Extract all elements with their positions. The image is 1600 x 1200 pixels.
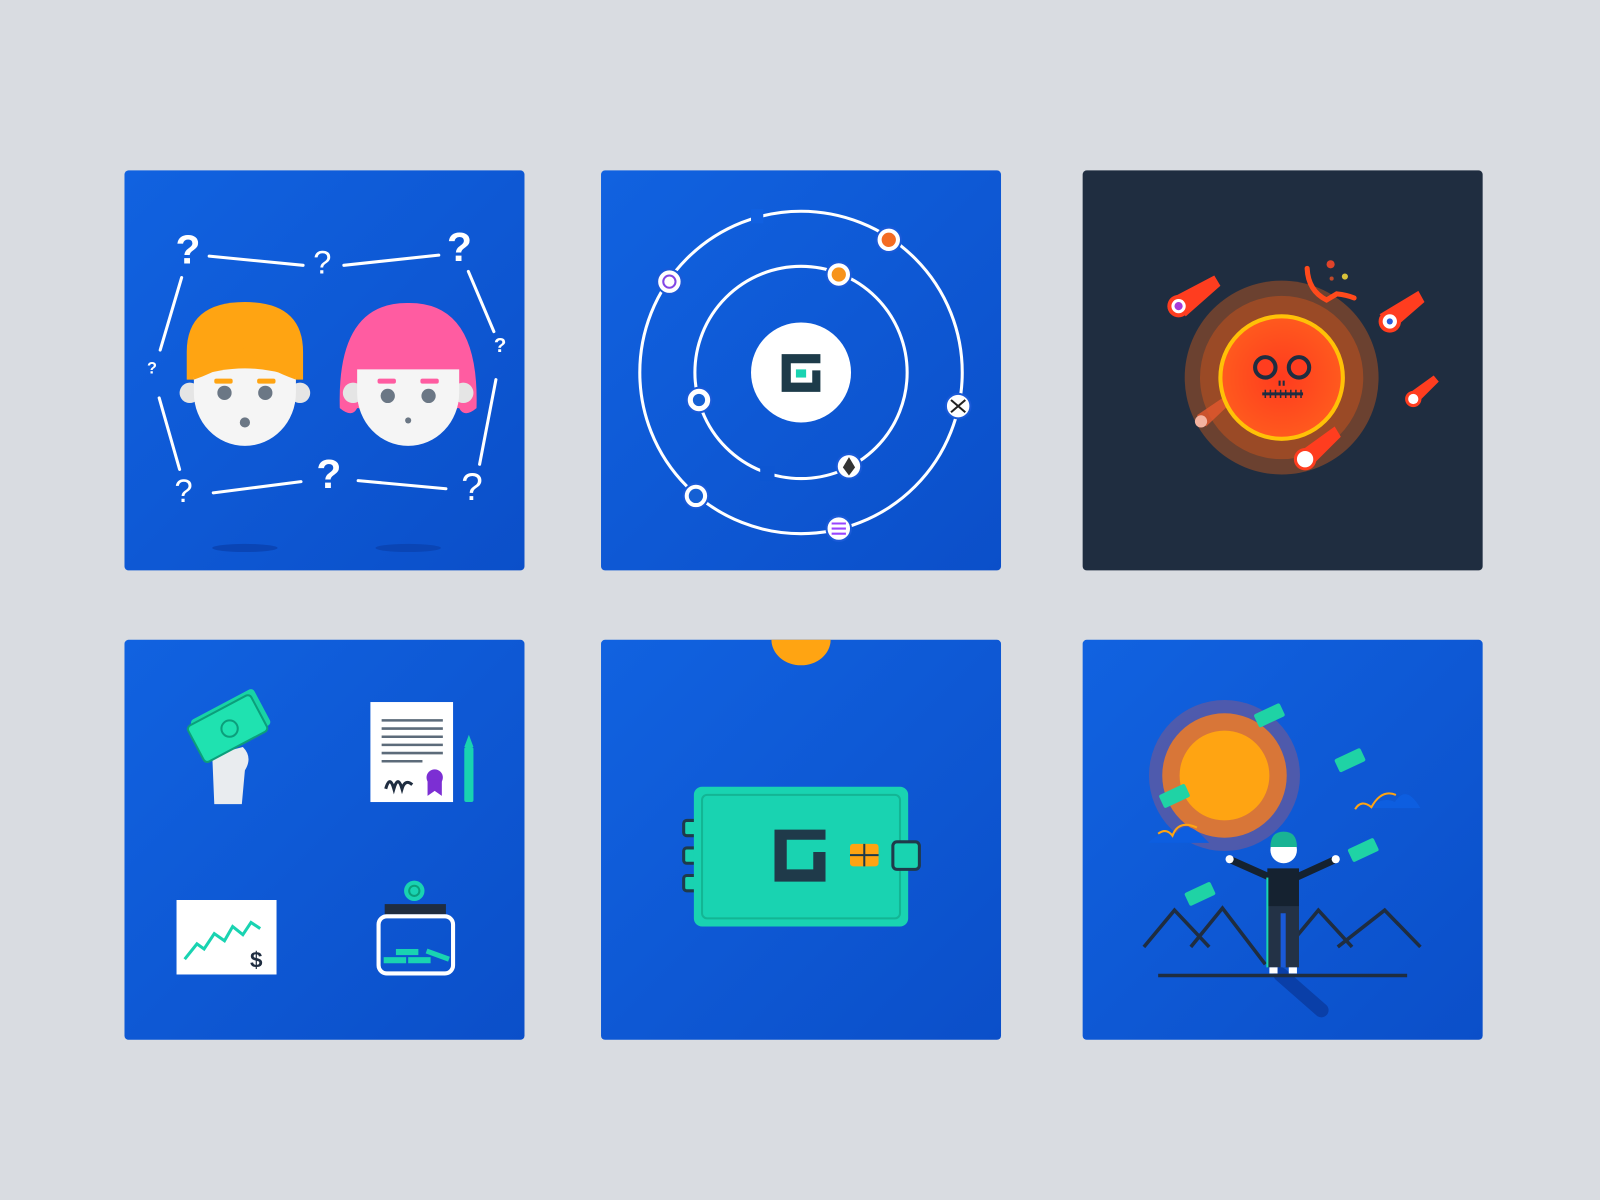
comets xyxy=(1167,276,1439,470)
panel: confused people: ? xyxy=(147,359,157,377)
question network xyxy=(159,255,496,493)
person xyxy=(1226,832,1340,973)
panel: confused people: ? xyxy=(494,335,506,357)
wallet xyxy=(684,787,919,927)
clouds xyxy=(1148,827,1209,843)
panel: confused people: ? xyxy=(461,466,483,509)
panel: skull sun xyxy=(1083,170,1483,570)
panel: confused people: ? xyxy=(176,226,200,272)
girl face xyxy=(340,303,477,552)
icon: hand with money xyxy=(186,688,272,804)
panel: finance icons xyxy=(124,640,524,1040)
sun xyxy=(1149,700,1300,851)
panel: confused people: ? xyxy=(447,224,472,270)
skull face xyxy=(1220,316,1343,439)
icon: chart: $ xyxy=(250,947,263,972)
panel: sunny success xyxy=(1083,640,1483,1040)
panel: confused people: ? xyxy=(174,472,193,509)
icon: coin top xyxy=(771,640,831,665)
panel: wallet xyxy=(601,640,1001,1040)
panel: confused people xyxy=(124,170,524,570)
panel: confused people: ? xyxy=(316,451,341,497)
boy face xyxy=(180,302,310,552)
coin icons xyxy=(657,228,970,541)
mountains xyxy=(1144,908,1420,964)
money bills xyxy=(1159,703,1379,906)
icon: jar xyxy=(379,881,453,973)
icon: contract xyxy=(370,702,473,802)
panel: confused people: ? xyxy=(313,243,331,280)
icon: chart xyxy=(177,900,277,974)
panel: crypto orbit xyxy=(601,170,1001,570)
logo center xyxy=(751,322,851,422)
